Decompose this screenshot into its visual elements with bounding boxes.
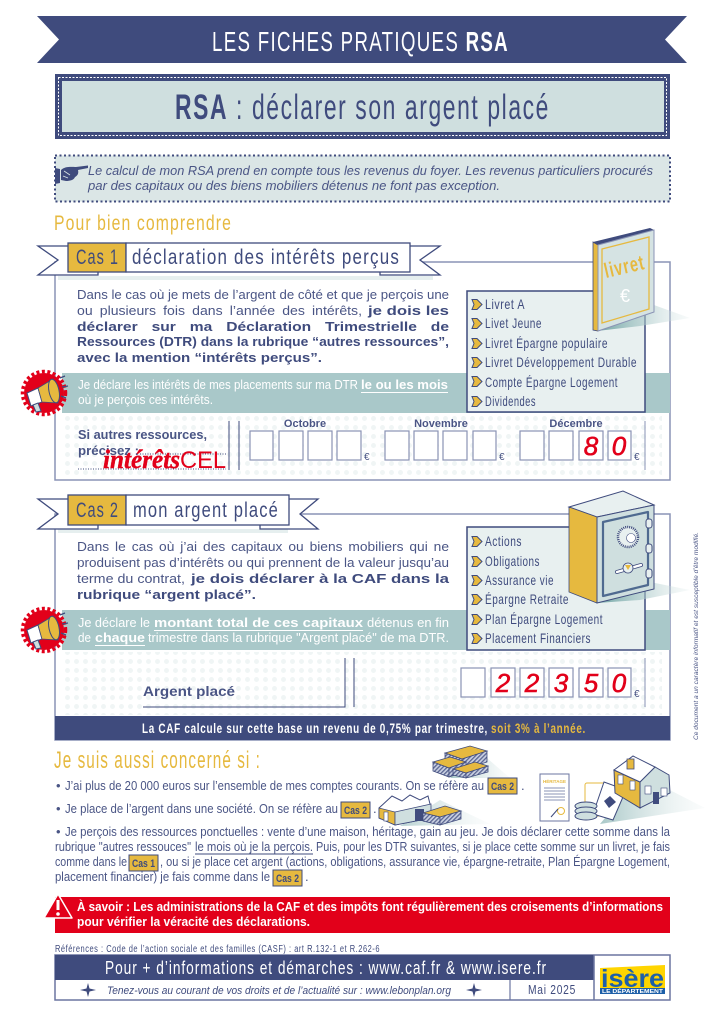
- bullet 2: •: [56, 801, 61, 816]
- chip: cas 1: Cas 1: [132, 858, 155, 870]
- icon: money stacks: [433, 746, 510, 778]
- logo: isère: isère: [601, 965, 664, 993]
- bullet 3 paragraph: comme dans le: [55, 854, 127, 869]
- icon: warning triangle: [44, 894, 72, 918]
- bullet 3 paragraph: .: [305, 869, 309, 884]
- bullet 3 paragraph: [55, 824, 671, 886]
- input boxes: 3: [554, 668, 569, 698]
- cas 1 paragraph: déclarer sur ma Déclaration Trimestrielle de: [77, 319, 449, 334]
- list: livrets: Dividendes: [485, 393, 536, 409]
- icon: megaphone: [22, 608, 68, 652]
- chip: cas 2: [488, 778, 517, 794]
- icon: livret book: [593, 228, 690, 331]
- house: [614, 756, 670, 808]
- band text: détenus en fin: [367, 615, 449, 630]
- month labels: Décembre: [549, 418, 603, 430]
- ribbon: cas 1: [38, 243, 440, 275]
- band text: Je déclare les intérêts de mes placements sur ma DTR: [78, 377, 358, 392]
- list: placements: Plan Épargne Logement: [485, 611, 603, 627]
- bullet 3 paragraph: le mois où je la perçois.: [195, 839, 313, 854]
- side legal note: Ce document a un caractère informatif et est susceptible d’être modifié.: [694, 532, 700, 740]
- cas 2 paragraph: terme du contrat,: [77, 571, 185, 586]
- bullet 1: •: [56, 778, 61, 793]
- list: placements: Assurance vie: [485, 572, 554, 588]
- icon: safe: [569, 491, 690, 603]
- title text: RSA : déclarer son argent placé: [175, 88, 550, 127]
- list: livrets: Livret Développement Durable: [485, 354, 637, 370]
- band text: où je perçois ces intérêts.: [78, 392, 213, 407]
- list: placements: Placement Financiers: [485, 630, 591, 646]
- input boxes: [461, 668, 640, 700]
- document: HÉRITAGE: [543, 777, 566, 784]
- banner heading: LES FICHES PRATIQUES RSA: [212, 26, 509, 57]
- document: [540, 774, 569, 821]
- input boxes: 2: [524, 668, 540, 698]
- cas 1 heading: déclaration des intérêts perçus: [132, 246, 400, 269]
- chips: [575, 802, 597, 820]
- icon: livret book: livret: [602, 251, 647, 283]
- icon: star left: [80, 983, 96, 997]
- chip: cas 2: Cas 2: [491, 781, 514, 793]
- cas 1 paragraph: [77, 287, 449, 365]
- panel: cas 1: [22, 228, 690, 480]
- handwritten entry: intérêts: [103, 445, 180, 474]
- input boxes: 8: [584, 431, 599, 461]
- list: placements: [467, 527, 645, 650]
- chip: cas 2: [341, 802, 370, 818]
- navy info bar: [55, 716, 670, 740]
- form: autres ressources: précisez :: [78, 443, 139, 458]
- cas 2 label: Cas 2: [76, 499, 119, 522]
- band text: [78, 615, 449, 646]
- section heading: pour bien comprendre: Pour bien comprendre: [54, 212, 232, 235]
- references: Références : Code de l’action sociale et des familles (CASF) : art R.132-1 et R.262-6: [55, 944, 380, 955]
- cards: [585, 782, 626, 820]
- section heading: je suis aussi concerné: Je suis aussi concerné si :: [54, 747, 261, 774]
- ribbon: cas 2: [38, 495, 318, 529]
- teal band: [62, 610, 670, 650]
- band text: montant total de ces capitaux: [154, 615, 364, 630]
- chip: cas 2: Cas 2: [276, 873, 299, 885]
- cas 2 paragraph: rubrique “argent placé”.: [77, 587, 256, 602]
- cas 1 paragraph: Dans le cas où je mets de l’argent de côté et que je perçois une: [77, 287, 449, 302]
- band text: trimestre dans la rubrique "Argent placé" de ma DTR.: [148, 630, 449, 645]
- icon: livret book: €: [620, 286, 630, 306]
- input boxes: 0: [612, 431, 627, 461]
- top banner: [37, 16, 687, 63]
- handwritten entry: [103, 445, 226, 474]
- chip: cas 2: Cas 2: [344, 805, 367, 817]
- bullet 1: J’ai plus de 20 000 euros sur l’ensemble de mes comptes courants. On se réfère au: [65, 778, 484, 793]
- chip: cas 2: [273, 870, 302, 886]
- bullet 1: .: [521, 778, 525, 793]
- list: livrets: Livret A: [485, 296, 525, 312]
- icon: megaphone: [22, 372, 68, 414]
- list: livrets: Livet Jeune: [485, 315, 542, 331]
- month labels: [284, 418, 603, 430]
- cas 2 paragraph: Dans le cas où j’ai des capitaux ou biens mobiliers qui ne: [77, 539, 449, 554]
- band text: Je déclare le: [78, 615, 150, 630]
- input boxes: 2: [495, 668, 511, 698]
- intro text: [87, 163, 653, 193]
- cas 1 paragraph: Ressources (DTR) dans la rubrique “autres ressources”,: [77, 334, 449, 349]
- cas 1 paragraph: je dois les: [367, 303, 449, 318]
- bullet 3 paragraph: •: [56, 824, 61, 839]
- month labels: Novembre: [414, 418, 468, 430]
- list: livrets: [467, 291, 645, 412]
- input boxes: €: [634, 689, 640, 700]
- list: livrets: Livret Épargne populaire: [485, 335, 608, 351]
- input boxes: €: [499, 452, 505, 463]
- intro text: Le calcul de mon RSA prend en compte tous les revenus du foyer. Les revenus particuliers procurés: [88, 163, 653, 178]
- bullet 3 paragraph: placement financier) je fais comme dans le: [55, 869, 270, 884]
- input boxes: €: [364, 452, 370, 463]
- list: placements: Épargne Retraite: [485, 591, 569, 607]
- form: autres ressources: [78, 418, 645, 474]
- input boxes: 5: [584, 668, 599, 698]
- icon: pointing hand: [55, 166, 88, 184]
- bullet 3 paragraph: rubrique "autres ressouces": [55, 839, 191, 854]
- handwritten entry: CEL: [180, 447, 226, 474]
- footer links: Pour + d’informations et démarches : www.caf.fr & www.isere.fr: [105, 958, 547, 978]
- list: placements: Actions: [485, 533, 522, 549]
- cas 2 paragraph: produisent pas d’intérêts ou qui prennent de la valeur jusqu’au: [77, 555, 449, 570]
- icon: star right: [466, 983, 482, 997]
- form: argent placé: [143, 658, 645, 707]
- form: autres ressources: Si autres ressources,: [78, 427, 207, 442]
- panel: cas 2: [22, 491, 690, 740]
- intro text: par des capitaux ou des biens mobiliers détenus ne font pas exception.: [87, 178, 500, 193]
- cas 1 paragraph: avec la mention “intérêts perçus”.: [77, 350, 322, 365]
- cas 2 paragraph: [77, 539, 450, 602]
- bullet 2: Je place de l’argent dans une société. On se réfère au: [65, 801, 338, 816]
- date: Mai 2025: [528, 982, 576, 997]
- cas 2 heading: mon argent placé: [133, 499, 279, 522]
- input boxes: 0: [612, 668, 627, 698]
- teal band: [62, 373, 670, 413]
- month labels: Octobre: [284, 418, 326, 430]
- footer tagline: Tenez-vous au courant de vos droits et de l’actualité sur : www.lebonplan.org: [107, 985, 452, 997]
- warning box: [44, 894, 670, 933]
- chip: cas 1: [129, 855, 158, 871]
- list: placements: Obligations: [485, 553, 540, 569]
- cas 1 paragraph: ou plusieurs fois dans l’année des intérêts,: [77, 303, 362, 318]
- intro box: [55, 156, 670, 202]
- warning text: À savoir : Les administrations de la CAF et des impôts font régulièrement des croisements d’informations: [77, 899, 663, 914]
- warning text: [77, 899, 663, 929]
- list: livrets: Compte Épargne Logement: [485, 374, 618, 390]
- title box: [55, 74, 670, 139]
- logo: isère: LE DÉPARTEMENT: [602, 987, 663, 995]
- navy info bar: soit 3% à l’année.: [491, 720, 586, 736]
- band text: [78, 377, 448, 407]
- band text: chaque: [95, 630, 145, 645]
- form: argent placé: Argent placé: [143, 683, 235, 699]
- navy info bar: La CAF calcule sur cette base un revenu de 0,75% par trimestre,: [142, 720, 488, 736]
- cas 1 label: Cas 1: [76, 246, 119, 269]
- cas 2 paragraph: je dois déclarer à la CAF dans la: [190, 571, 450, 586]
- band text: le ou les mois: [361, 377, 448, 392]
- bullet 2: .: [373, 801, 377, 816]
- footer: [55, 955, 670, 1000]
- input boxes: €: [634, 452, 640, 463]
- warning text: pour vérifier la véracité des déclarations.: [77, 914, 310, 929]
- icon: inheritance, cards and house: [540, 756, 705, 824]
- input boxes: [250, 431, 640, 463]
- band text: de: [78, 630, 91, 645]
- icon: factory and money: [379, 795, 490, 826]
